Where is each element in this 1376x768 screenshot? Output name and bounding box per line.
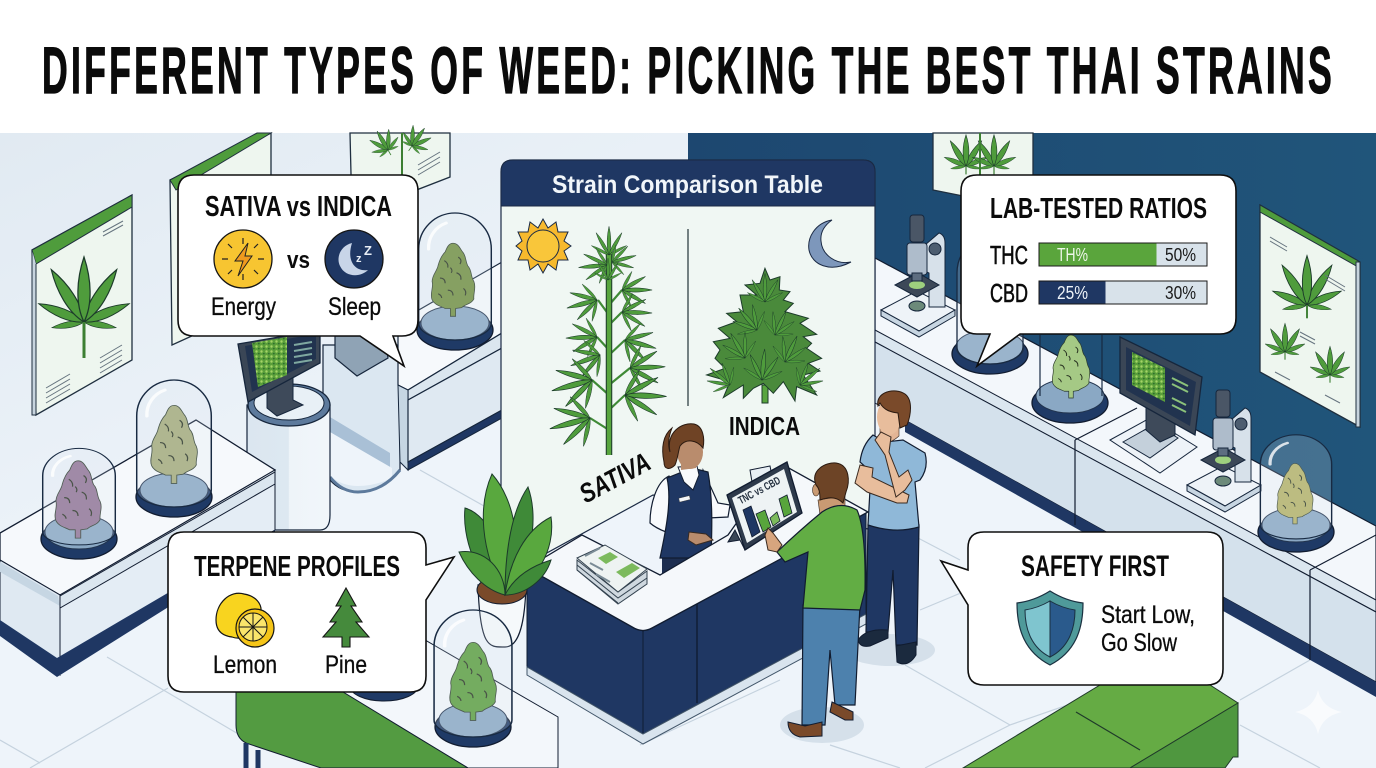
CBD bar: [1039, 281, 1207, 304]
THC label: THC: [990, 240, 1028, 270]
board heading: Strain Comparison Table: [552, 171, 823, 199]
watermark sparkle: [1295, 690, 1342, 734]
icon: energy: [214, 230, 272, 288]
poster: third plant: [350, 119, 450, 215]
dome: front green bud: [434, 610, 512, 747]
icon: pine: [323, 588, 369, 647]
monitor and keyboard: [1110, 337, 1202, 473]
dome: green bud upper left: [417, 213, 493, 350]
CBD label: CBD: [990, 278, 1028, 308]
right lab counter: [875, 258, 1376, 697]
hidden dome base: [350, 671, 418, 701]
counter top: [527, 467, 868, 630]
tablet label: TNC vs CBD: [736, 475, 783, 507]
green bench front right: [963, 685, 1238, 768]
icon: sleep: [325, 230, 383, 288]
callout heading: SATIVA vs INDICA: [205, 191, 392, 223]
panel: strain comparison board: [501, 160, 875, 578]
tablet: [727, 462, 802, 550]
poster: second left: [170, 133, 271, 345]
indica label: INDICA: [729, 411, 800, 441]
sleep label: Sleep: [328, 293, 381, 321]
callout: safety first: [941, 532, 1223, 685]
title band: [0, 0, 1376, 133]
potted plant: [459, 474, 552, 647]
receptionist: [650, 424, 730, 578]
safety text: [1101, 601, 1195, 657]
white display table: [343, 640, 558, 768]
safety text: Go Slow: [1101, 629, 1178, 657]
callout: lab-tested ratios: [961, 175, 1236, 366]
callout heading: LAB-TESTED RATIOS: [990, 193, 1207, 225]
person in blue shirt: [845, 391, 935, 666]
THC bar: 50%: [1165, 245, 1196, 265]
microscope: lower: [1187, 390, 1261, 512]
left front counter: [0, 420, 275, 677]
brochure stack: [577, 545, 647, 604]
callout: terpene profiles: [168, 532, 454, 692]
icon: shield: [1017, 591, 1083, 665]
CBD bar: 25%: [1057, 283, 1088, 303]
tablet bars: [743, 495, 792, 537]
dome: light green bud: [1032, 335, 1108, 423]
pine label: Pine: [325, 651, 367, 679]
sativa plant: [543, 226, 668, 455]
divider: [687, 229, 689, 406]
icon: moon: [809, 220, 851, 267]
poster: top right: [933, 133, 1033, 210]
counter right navy face: [643, 512, 866, 734]
glass pillar: [323, 345, 400, 492]
counter left navy face: [527, 568, 643, 734]
counter seam: [696, 600, 698, 703]
green bench front left: [236, 692, 468, 768]
energy label: Energy: [211, 293, 276, 321]
sativa label: SATIVA: [574, 447, 656, 509]
printer unit: [335, 336, 388, 376]
poster: right leaves: [1260, 205, 1360, 427]
dome: behind lab callout: [952, 237, 1028, 374]
callout: sativa vs indica: [178, 175, 418, 366]
lemon label: Lemon: [213, 651, 277, 679]
poster: left leaf: [32, 195, 132, 415]
dome: yellow bud: [1258, 435, 1334, 552]
left back counter: [398, 262, 502, 470]
dome: purple bud: [41, 448, 117, 559]
THC bar: [1039, 243, 1207, 266]
callout heading: SAFETY FIRST: [1021, 550, 1169, 583]
icon: sleep: z: [356, 253, 362, 265]
board header: [501, 160, 875, 206]
CBD bar: 30%: [1165, 283, 1196, 303]
icon: sleep: Z: [364, 243, 372, 258]
THC bar: TH%: [1057, 245, 1088, 265]
monitor on pedestal: [238, 330, 330, 530]
icon: sun: [516, 219, 571, 273]
vs label: vs: [287, 247, 310, 274]
callout heading: TERPENE PROFILES: [194, 551, 400, 583]
dome: sage bud: [136, 380, 212, 517]
person in green shirt: [765, 463, 865, 743]
microscope: upper: [881, 215, 955, 337]
safety text: Start Low,: [1101, 601, 1195, 629]
counter base strip: [527, 614, 866, 744]
indica plant: [699, 268, 831, 403]
reception counter: [527, 467, 868, 744]
icon: lemon: [216, 593, 274, 647]
